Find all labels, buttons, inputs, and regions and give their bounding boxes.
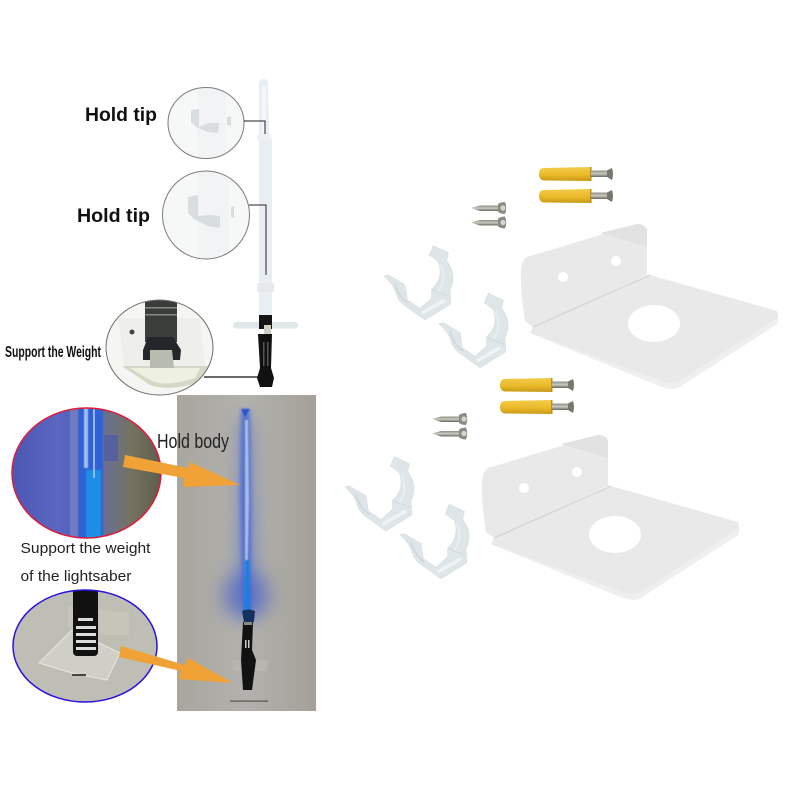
panel: upper hardware set [384, 167, 778, 389]
leader line: base [204, 376, 258, 378]
inset circle: upper tip clip [168, 85, 244, 161]
arrow: to base bracket [119, 646, 233, 683]
leader line: lower tip [249, 205, 266, 275]
panel: blue lit photo [12, 395, 316, 711]
label: hold tip 1: Hold tip [85, 105, 157, 126]
text: support the weight of the lightsaber: Support the weight [20, 540, 151, 557]
inset circle: hilt on base bracket [106, 300, 213, 395]
inset ellipse: hilt on base, blue border [13, 588, 157, 702]
label: hold body: Hold body [157, 431, 229, 453]
arrow: to blade clip [123, 455, 240, 487]
leader line: upper tip [244, 121, 265, 134]
label: support the weight: Support the Weight [5, 344, 101, 361]
inset circle: lower tip clip [162, 170, 250, 260]
panel: white lightsaber diagram [5, 79, 298, 395]
inset ellipse: blade clip, red border [12, 408, 161, 540]
label: hold tip 2: Hold tip [77, 206, 150, 227]
photo: mounted lit lightsaber on wall [177, 395, 316, 711]
text: support the weight of the lightsaber [20, 540, 151, 585]
white lightsaber [233, 79, 298, 387]
panel: lower hardware set [345, 378, 739, 600]
text: support the weight of the lightsaber: of the lightsaber [20, 568, 132, 585]
